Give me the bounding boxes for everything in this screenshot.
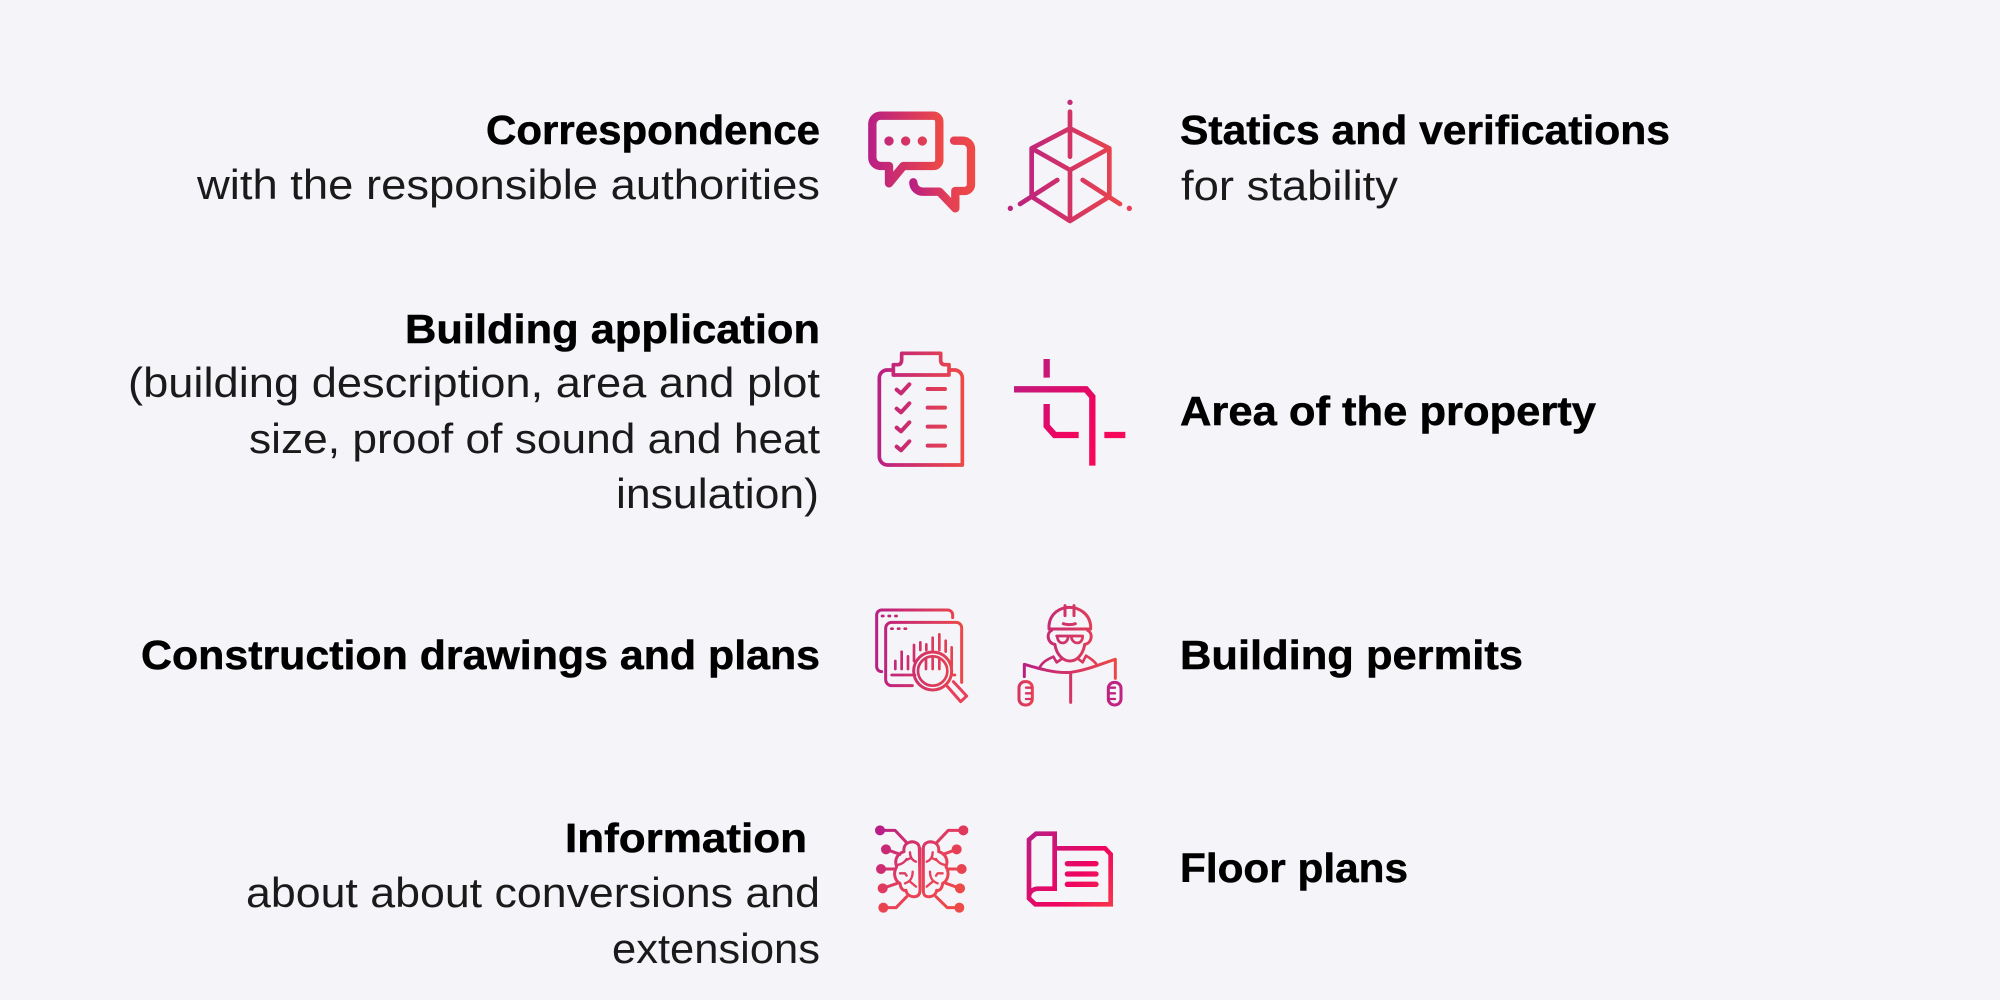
icon: charts with magnifier [877, 610, 967, 702]
heading: Building application: Building application [405, 306, 820, 352]
right text: floor plans: Floor plans [1180, 845, 1408, 891]
icon: blueprint scroll [1029, 834, 1111, 904]
icon: brain circuit [875, 825, 968, 913]
text: about conversions and: about about conversions and [246, 869, 820, 916]
text: for stability: for stability [1181, 162, 1398, 209]
icon: clipboard checklist [879, 353, 962, 465]
icon: speech bubbles [872, 116, 971, 208]
heading: Information: Information [565, 815, 807, 861]
right text: statics [1180, 107, 1670, 209]
heading: Correspondence: Correspondence [486, 107, 820, 153]
left text: construction drawings: Construction drawings and plans [141, 632, 820, 678]
heading: Statics and verifications: Statics and verifications [1180, 107, 1670, 153]
text: insulation: insulation) [616, 470, 819, 517]
icon: crop area [1014, 359, 1125, 466]
left text: correspondence [196, 107, 820, 208]
right text: area of the property: Area of the property [1180, 388, 1596, 434]
right text: building permits: Building permits [1180, 632, 1523, 678]
left text: information [246, 815, 820, 972]
text: proof of sound and heat: size, proof of sound and heat [249, 415, 820, 462]
icon: wireframe cube [1008, 100, 1132, 221]
left text: building application [128, 306, 820, 517]
text: with the responsible authorities: with the responsible authorities [196, 161, 820, 208]
text: extensions: extensions [612, 925, 820, 972]
text: building description: (building description, area and plot [128, 359, 820, 406]
icon: construction worker with plan [1019, 606, 1121, 705]
